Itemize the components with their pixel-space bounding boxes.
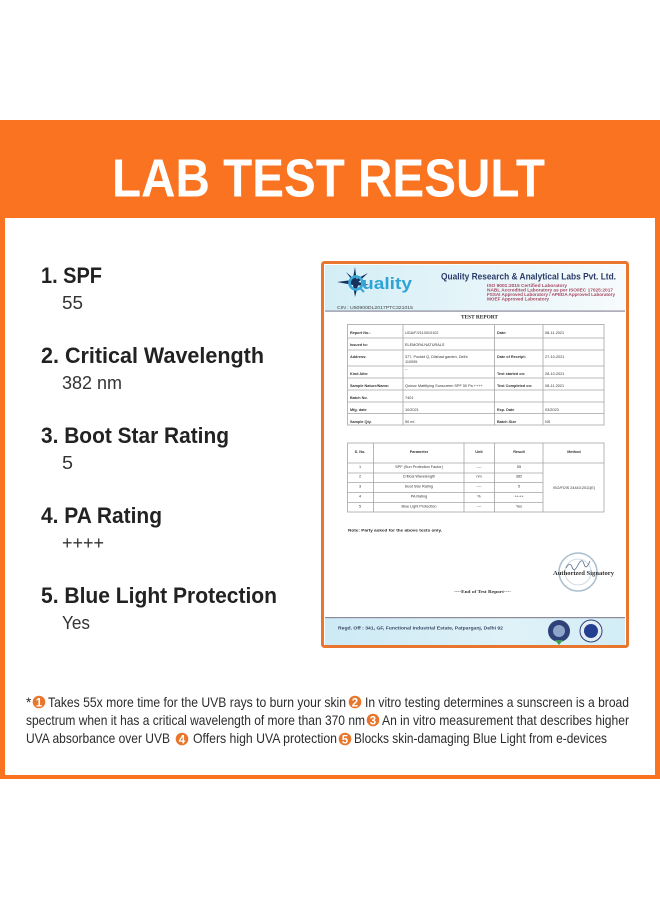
parameter results table: 3 (359, 484, 361, 488)
report details table: 7401 (405, 396, 413, 400)
report details table: Sample Nature/Name: (350, 384, 389, 388)
report details table: Date of Receipt: (497, 355, 526, 359)
report letterhead (325, 265, 625, 312)
report details table (348, 324, 604, 425)
item 1: SPF (41, 263, 102, 313)
lab report document (322, 262, 628, 646)
accreditations (487, 283, 616, 302)
note badge 5: 5 (342, 734, 349, 746)
orange frame panel (0, 120, 660, 779)
footnote: Blocks skin-damaging Blue Light from e-devices (354, 731, 607, 746)
parameter results table: Method (567, 450, 581, 454)
footnote: An in vitro measurement that describes higher (382, 713, 629, 728)
item 1: SPF: 55 (62, 293, 83, 313)
results list (41, 263, 277, 633)
report details table: Kind Attn: (350, 372, 368, 376)
report details table: Quinzz Mattifying Sunscreen SPF 50 Pa ++++ (405, 384, 483, 388)
CIN number: CIN : U50900DL2017PTC321015 (337, 305, 414, 310)
parameter results table: Result (513, 450, 526, 454)
report details table: 110095 (405, 360, 417, 364)
item 3: Boot Star Rating: 5 (62, 453, 73, 473)
parameter results table: 382 (516, 474, 522, 478)
footnote: Takes 55x more time for the UVB rays to burn your skin (48, 695, 346, 710)
report details table: Exp. Date (497, 408, 514, 412)
accreditations: NABL Accredited Laboratory as per ISO/IEC 17025:2017 (487, 287, 614, 292)
report details table: Batch Size (497, 420, 516, 424)
item 5: Blue Light Protection: Yes (62, 613, 90, 633)
report details table: 28-10-2021 (545, 372, 564, 376)
report footer band: Regd. Off : 341, GF, Functional Industrial Estate, Patparganj, Delhi 92 (338, 626, 503, 632)
parameter results table: Yes (516, 504, 522, 508)
parameter results table: Boot Star Rating (405, 484, 433, 488)
lab name: Quality Research & Analytical Labs Pvt. Ltd. (441, 272, 616, 282)
parameter results table: 55 (517, 465, 521, 469)
footnote (26, 695, 629, 746)
accreditations: MOEF Approved Laboratory (487, 296, 550, 302)
report footer band (325, 617, 625, 645)
parameter results table: ---- (476, 465, 482, 469)
item 5: Blue Light Protection: 5. Blue Light Protection (41, 583, 277, 608)
parameter results table: Critical Wavelength (403, 474, 435, 478)
parameter results table: ISO/FDIS 24443:2011(E) (553, 486, 596, 490)
item 3: Boot Star Rating: 3. Boot Star Rating (41, 423, 229, 448)
icon: star logo (337, 267, 413, 297)
report note: Note: Party asked for the above tests only. (348, 528, 442, 532)
report details table: 10/2021 (405, 408, 419, 412)
parameter results table: 5 (359, 504, 361, 508)
parameter results table: ---- (476, 504, 482, 508)
parameter results table: 5 (518, 484, 520, 488)
parameter results table: 4 (359, 494, 361, 498)
parameter results table: Parameter (410, 450, 429, 454)
report details table: 27-10-2021 (545, 355, 564, 359)
note badge 3 (367, 714, 379, 728)
report details table: Batch No. (350, 396, 368, 400)
note badge 5 (339, 733, 351, 746)
item 5: Blue Light Protection (41, 583, 277, 633)
parameter results table: SPF (Sun Protection Factor) (395, 465, 444, 469)
report details table: 08-11-2021 (545, 331, 564, 335)
accreditations: ISO 9001:2015 Certified Laboratory (487, 283, 568, 288)
parameter results table: PA Rating (411, 494, 427, 498)
report heading: TEST REPORT (461, 316, 499, 320)
parameter results table: % (477, 494, 481, 498)
report details table: Report No.: (350, 331, 371, 335)
report details table: 50 ml (405, 420, 414, 424)
parameter results table: 1 (359, 465, 361, 469)
parameter results table: S. No. (355, 450, 365, 454)
parameter results table (348, 443, 604, 512)
item 2: Critical Wavelength (41, 343, 264, 393)
title: LAB TEST RESULT (112, 148, 545, 208)
footnote: * (26, 695, 32, 710)
item 4: PA Rating (41, 503, 162, 553)
icon: certification badges (548, 620, 602, 645)
report details table: Issued to: (350, 343, 368, 347)
report details table: Test started on: (497, 372, 525, 376)
parameter results table: Blue Light Protection (401, 504, 437, 508)
parameter results table: Unit (475, 450, 483, 454)
item 1: SPF: 1. SPF (41, 263, 102, 288)
note badge 1 (33, 696, 45, 710)
footnote: spectrum when it has a critical wavelength of more than 370 nm (26, 713, 365, 728)
report details table: ELEMORA NATURALS (405, 343, 445, 347)
signatory stamp (553, 553, 614, 591)
report details table: 08-11-2021 (545, 384, 564, 388)
report details table: 377, Pocket Q, Dilshad garden, Delhi (405, 355, 468, 359)
icon: star logo: uality (362, 274, 413, 293)
item 2: Critical Wavelength: 382 nm (62, 373, 122, 393)
note badge 4 (176, 733, 188, 746)
parameter results table: 2 (359, 474, 361, 478)
note badge 3: 3 (370, 716, 376, 728)
report details table: Address: (350, 355, 366, 359)
report details table: Sample Qty. (350, 420, 372, 424)
signatory stamp: Authorized Signatory (553, 571, 614, 577)
item 3: Boot Star Rating (41, 423, 229, 473)
item 2: Critical Wavelength: 2. Critical Wavelength (41, 343, 264, 368)
report details table: Test Completed on: (497, 384, 532, 388)
end of report: ----End of Test Report---- (454, 589, 512, 594)
accreditations: FSSAI Approved Laboratory / APEDA Approved Laboratory (487, 292, 616, 297)
parameter results table: ++++ (515, 494, 524, 498)
note badge 4: 4 (179, 734, 186, 746)
parameter results table: ---- (476, 484, 482, 488)
item 4: PA Rating: ++++ (62, 533, 104, 553)
note badge 2: 2 (352, 698, 358, 710)
footnote: In vitro testing determines a sunscreen is a broad (365, 695, 629, 710)
footnote: UVA absorbance over UVB (26, 731, 170, 746)
report details table: NS (545, 420, 551, 424)
report details table: Mfg. date (350, 408, 367, 412)
report details table: Date: (497, 331, 506, 335)
item 4: PA Rating: 4. PA Rating (41, 503, 162, 528)
report details table: -- (405, 367, 408, 371)
report details table: UGA/F/2110010102 (405, 331, 438, 335)
report details table: 03/2023 (545, 408, 559, 412)
note badge 1: 1 (36, 698, 43, 710)
footnote: Offers high UVA protection (193, 731, 337, 746)
parameter results table: nm (476, 474, 482, 478)
note badge 2 (349, 696, 361, 710)
